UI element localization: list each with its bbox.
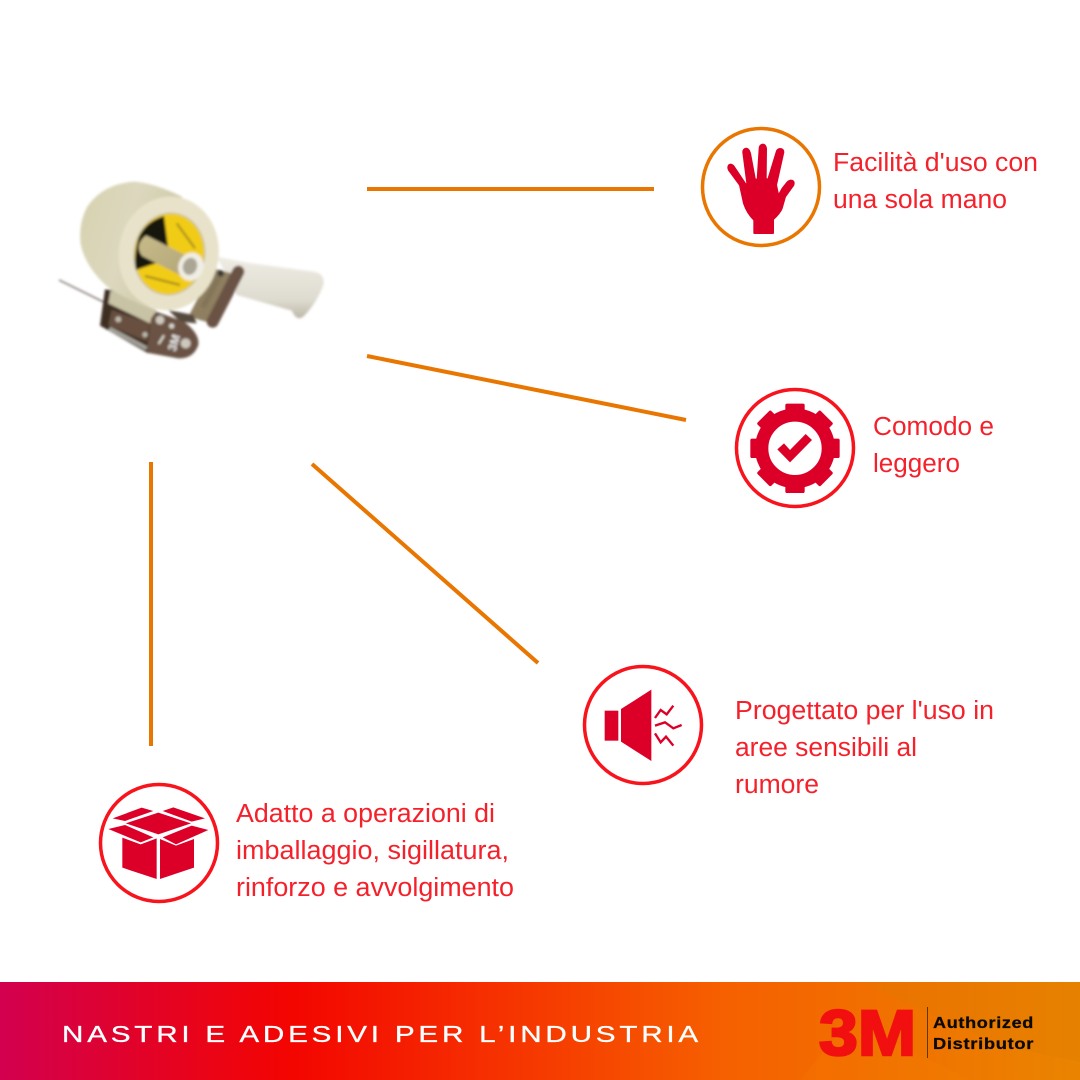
3M authorized distributor logo: Distributor (933, 1036, 1034, 1053)
feature: packaging operations (100, 784, 514, 902)
icon: gear with check mark (736, 390, 854, 506)
footer banner (0, 982, 1080, 1080)
label: packaging operations (236, 800, 514, 902)
label: noise-sensitive areas: aree sensibili al (735, 734, 917, 762)
connector line: speaker (312, 464, 538, 663)
label: packaging operations: Adatto a operazioni di (236, 800, 495, 828)
label: noise-sensitive areas: rumore (735, 771, 819, 799)
base frame and front plate (59, 280, 198, 358)
icon: open box (100, 784, 218, 902)
3M authorized distributor logo: 3M (819, 997, 916, 1069)
feature: comfortable and light (736, 390, 994, 506)
label: comfortable and light: Comodo e (873, 413, 994, 441)
product image: tape dispenser (59, 182, 324, 358)
label: packaging operations: rinforzo e avvolgimento (236, 874, 514, 902)
label: one-handed use: una sola mano (833, 186, 1007, 214)
label: noise-sensitive areas (735, 697, 994, 799)
clear tape roll and core (80, 182, 226, 317)
feature: one-handed use (702, 128, 1038, 246)
label: noise-sensitive areas: Progettato per l'uso in (735, 697, 994, 725)
icon: speaker (584, 666, 702, 784)
plate logo: 3M (165, 333, 183, 353)
3M authorized distributor logo: Authorized (933, 1015, 1034, 1032)
label: packaging operations: imballaggio, sigillatura, (236, 837, 509, 865)
label: one-handed use (833, 149, 1038, 214)
connector line: box (149, 462, 153, 746)
dispenser handle and lever (188, 257, 324, 323)
connector line: gear (367, 356, 686, 420)
banner title: NASTRI E ADESIVI PER L’INDUSTRIA (62, 1021, 702, 1047)
label: comfortable and light (873, 413, 994, 478)
label: one-handed use: Facilità d'uso con (833, 149, 1038, 177)
feature: noise-sensitive areas (584, 666, 994, 799)
3M authorized distributor logo (819, 997, 1034, 1069)
icon: hand in orange circle (702, 128, 820, 246)
label: comfortable and light: leggero (873, 450, 960, 478)
connector line: hand (367, 187, 654, 191)
